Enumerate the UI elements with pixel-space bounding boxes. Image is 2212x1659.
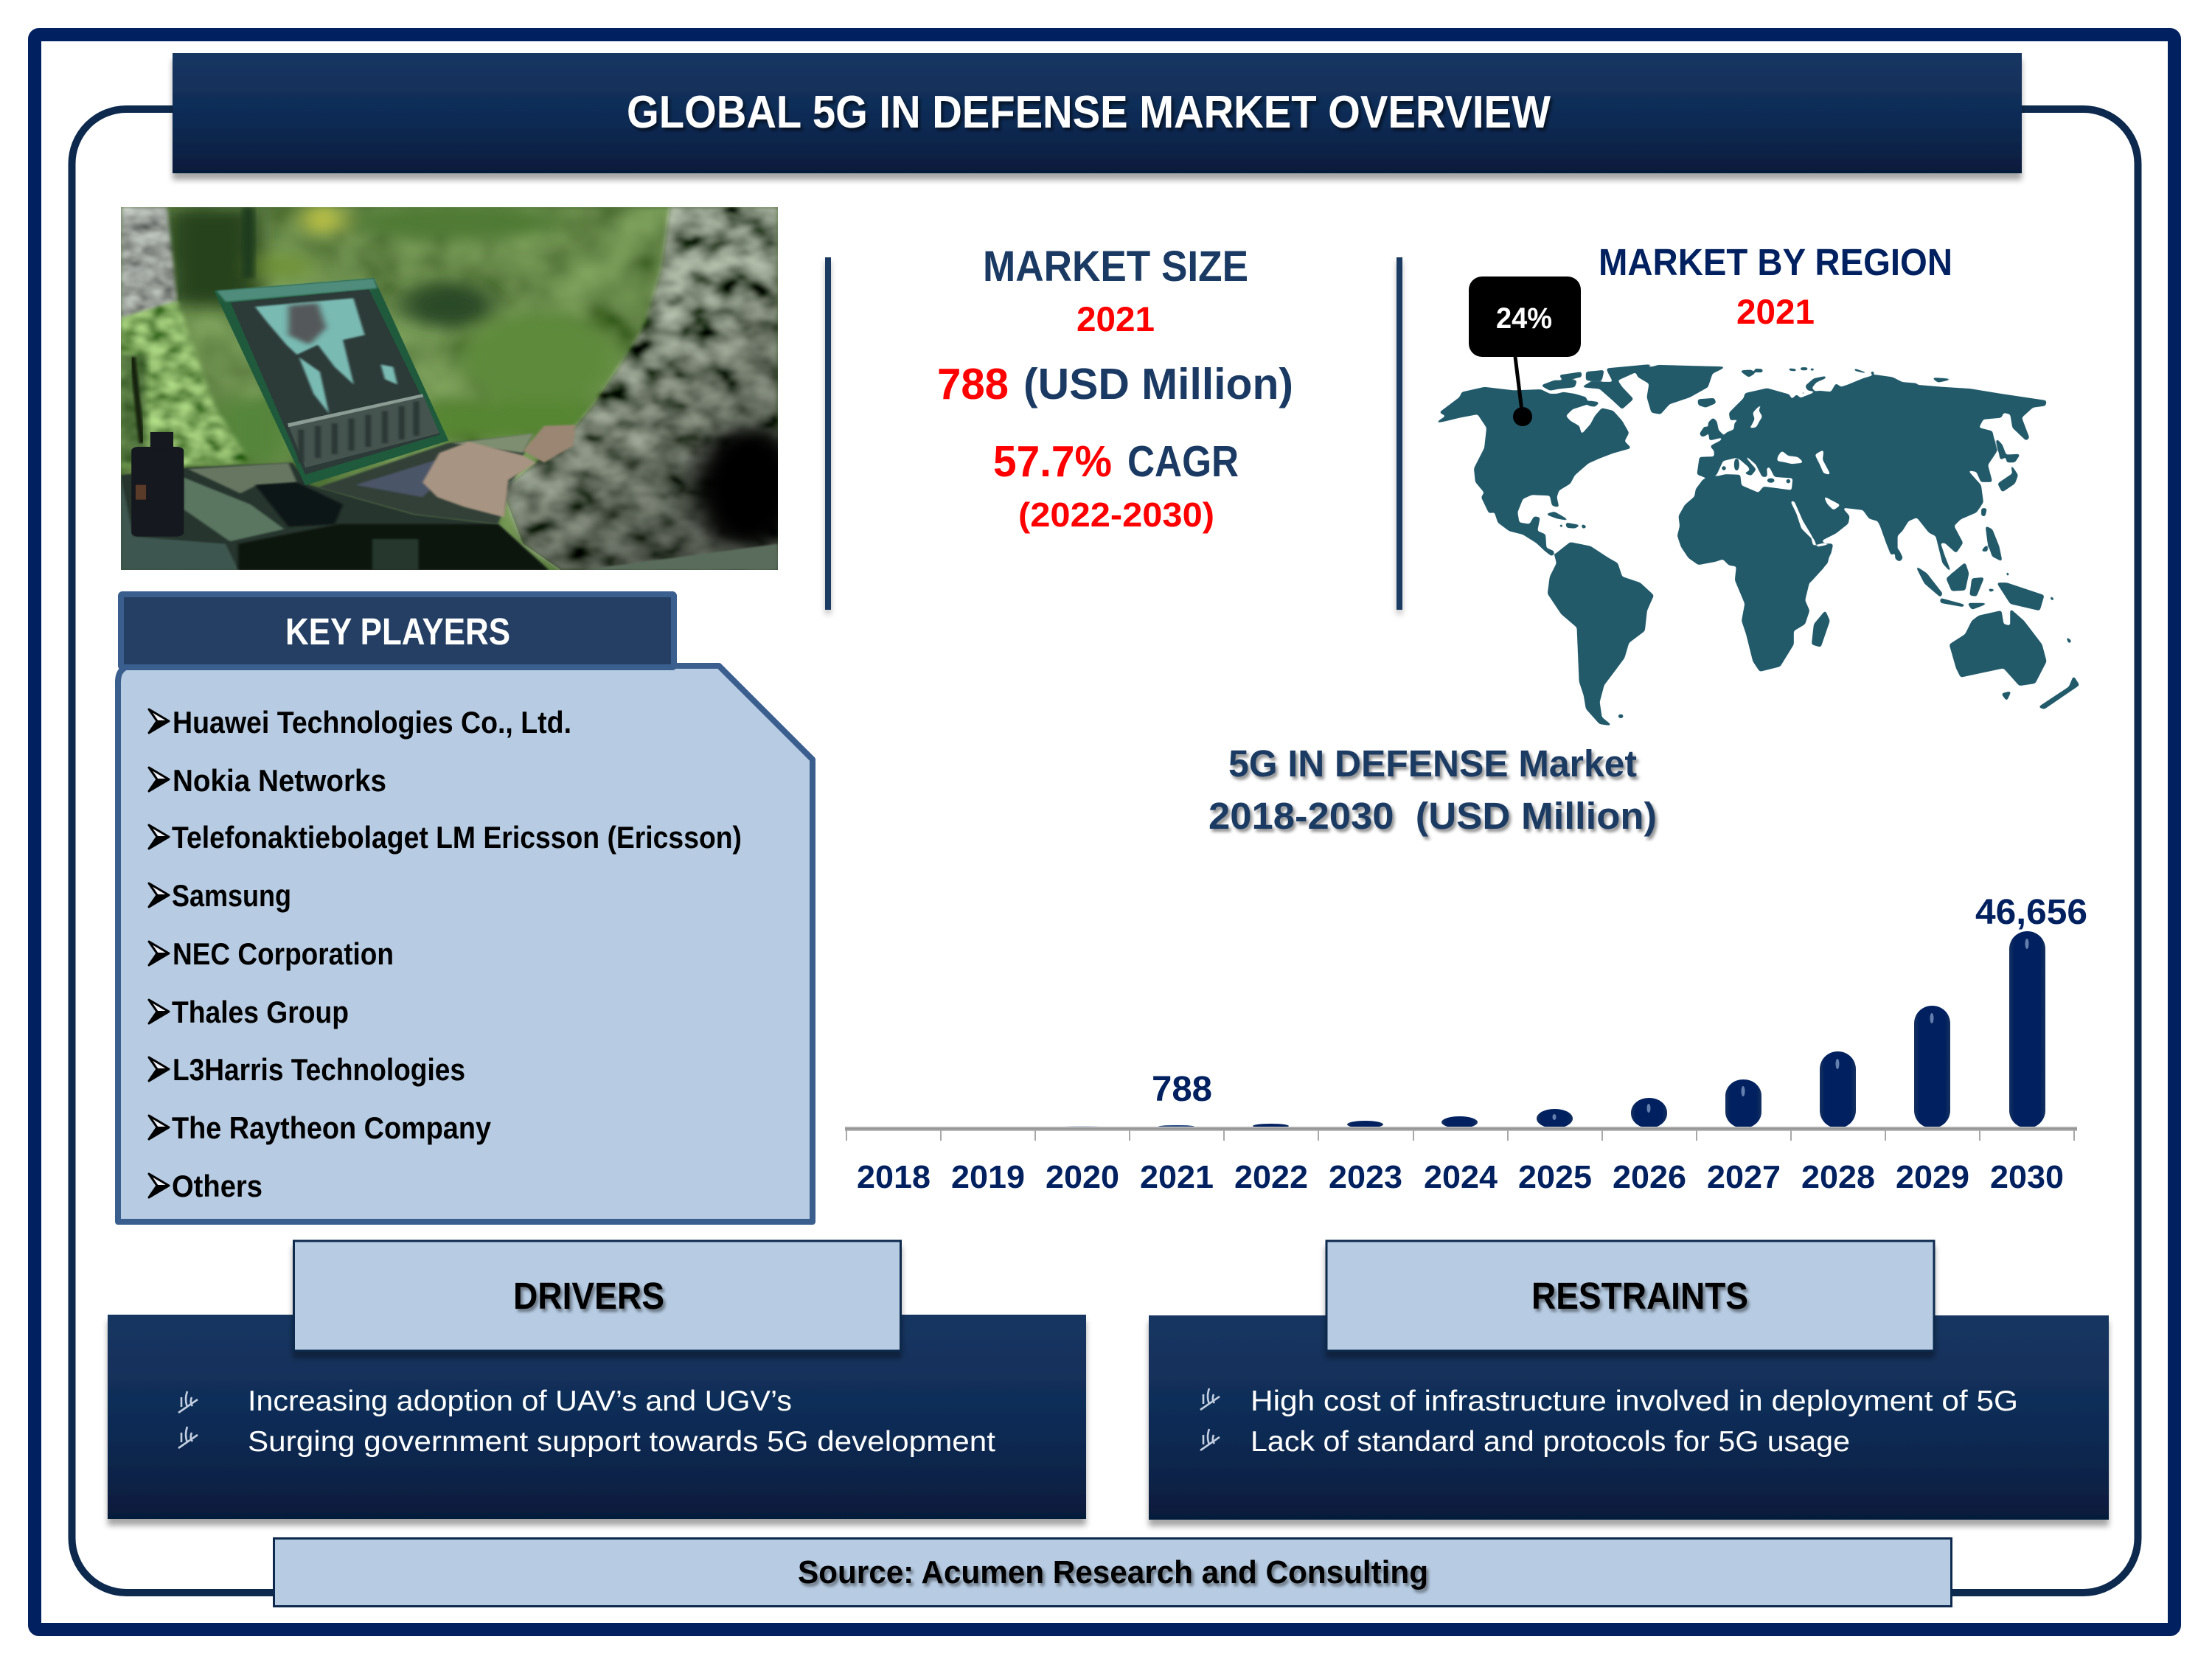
chart title: 2018-2030 (USD Million) bbox=[1208, 795, 1657, 837]
panel: key players bbox=[118, 594, 813, 1222]
panel: market size: MARKET SIZE bbox=[983, 243, 1248, 291]
year labels: 2021 bbox=[1140, 1159, 1214, 1195]
photo: soldier using laptop in forest bbox=[121, 205, 804, 570]
drivers tab: DRIVERS bbox=[513, 1275, 664, 1317]
key players list: Nokia Networks bbox=[173, 763, 386, 798]
callout: 24% North America: 24% bbox=[1496, 302, 1552, 335]
title: GLOBAL 5G IN DEFENSE MARKET OVERVIEW bbox=[627, 87, 1551, 138]
divider: left of market size bbox=[825, 257, 831, 610]
panel: restraints bbox=[1149, 1241, 2109, 1520]
region heading: MARKET BY REGION bbox=[1599, 241, 1952, 283]
drivers list: Surging government support towards 5G development bbox=[248, 1426, 995, 1458]
key players list bbox=[149, 705, 742, 1203]
divider: left of market by region bbox=[1397, 257, 1402, 610]
drivers list: Increasing adoption of UAV’s and UGV’s bbox=[248, 1385, 792, 1417]
title banner bbox=[173, 53, 2022, 173]
restraints tab: RESTRAINTS bbox=[1531, 1275, 1748, 1317]
year labels: 2027 bbox=[1707, 1159, 1781, 1195]
panel: market size: (2022-2030) bbox=[1018, 495, 1214, 534]
callout: 24% North America bbox=[1469, 276, 1581, 426]
key players list: Others bbox=[172, 1169, 262, 1203]
key players list: Telefonaktiebolaget LM Ericsson (Ericsson) bbox=[172, 820, 742, 855]
panel: market size: 788 bbox=[937, 360, 1009, 408]
restraints list: High cost of infrastructure involved in deployment of 5G bbox=[1251, 1385, 2018, 1417]
radio and phone bbox=[131, 357, 343, 537]
panel: market size: CAGR bbox=[1127, 437, 1239, 486]
source bar: Source: Acumen Research and Consulting bbox=[798, 1554, 1428, 1590]
year labels: 2018 bbox=[857, 1159, 931, 1195]
icon: bullet bbox=[178, 1427, 198, 1448]
bar highlights bbox=[1553, 939, 2029, 1120]
data label 2021: 788 bbox=[1152, 1070, 1212, 1109]
restraints list bbox=[1251, 1385, 2018, 1458]
key players list: Thales Group bbox=[172, 995, 349, 1029]
bar chart bbox=[845, 893, 2087, 1195]
year labels bbox=[857, 1159, 2064, 1195]
x axis bbox=[845, 1127, 2077, 1131]
key players list: The Raytheon Company bbox=[172, 1110, 492, 1145]
key players list: Huawei Technologies Co., Ltd. bbox=[173, 705, 571, 740]
year labels: 2028 bbox=[1801, 1159, 1875, 1195]
chart title: 5G IN DEFENSE Market bbox=[1228, 742, 1637, 785]
drivers list bbox=[248, 1385, 995, 1458]
year labels: 2029 bbox=[1896, 1159, 1969, 1195]
data label 2030: 46,656 bbox=[1975, 893, 2087, 932]
icon: bullet bbox=[1200, 1429, 1220, 1450]
key players list background bbox=[118, 666, 813, 1222]
year labels: 2030 bbox=[1990, 1159, 2064, 1195]
restraints list: Lack of standard and protocols for 5G usage bbox=[1251, 1426, 1850, 1458]
tree trunk bbox=[121, 207, 251, 467]
drivers tab bbox=[293, 1241, 901, 1351]
panel: market size: 2021 bbox=[1077, 299, 1155, 338]
key players list: L3Harris Technologies bbox=[173, 1052, 465, 1087]
source bar bbox=[274, 1538, 1951, 1606]
key players heading bbox=[121, 594, 674, 667]
key players list: Samsung bbox=[172, 878, 291, 913]
icon: bullet bbox=[1200, 1388, 1220, 1410]
laptop bbox=[214, 278, 534, 524]
restraints tab bbox=[1326, 1241, 1934, 1351]
table and crate bbox=[121, 463, 549, 570]
hands bbox=[422, 425, 575, 518]
key players heading: KEY PLAYERS bbox=[285, 611, 510, 653]
panel: market size bbox=[937, 243, 1293, 534]
year labels: 2025 bbox=[1518, 1159, 1592, 1195]
year labels: 2022 bbox=[1234, 1159, 1308, 1195]
panel: market size: 57.7% bbox=[993, 437, 1112, 486]
chart title bbox=[1208, 742, 1657, 837]
year labels: 2020 bbox=[1046, 1159, 1119, 1195]
panel: market by region bbox=[1435, 241, 2079, 726]
panel: drivers bbox=[108, 1241, 1086, 1519]
region year: 2021 bbox=[1736, 292, 1815, 331]
panel: market size: (USD Million) bbox=[1023, 360, 1293, 408]
year labels: 2026 bbox=[1613, 1159, 1686, 1195]
bars bbox=[1064, 931, 2045, 1128]
year labels: 2019 bbox=[951, 1159, 1025, 1195]
year labels: 2024 bbox=[1424, 1159, 1498, 1195]
soldier arm camouflage bbox=[502, 207, 804, 570]
key players list: NEC Corporation bbox=[173, 936, 394, 971]
year labels: 2023 bbox=[1329, 1159, 1402, 1195]
world map bbox=[1435, 364, 2079, 726]
icon: bullet bbox=[178, 1391, 198, 1413]
